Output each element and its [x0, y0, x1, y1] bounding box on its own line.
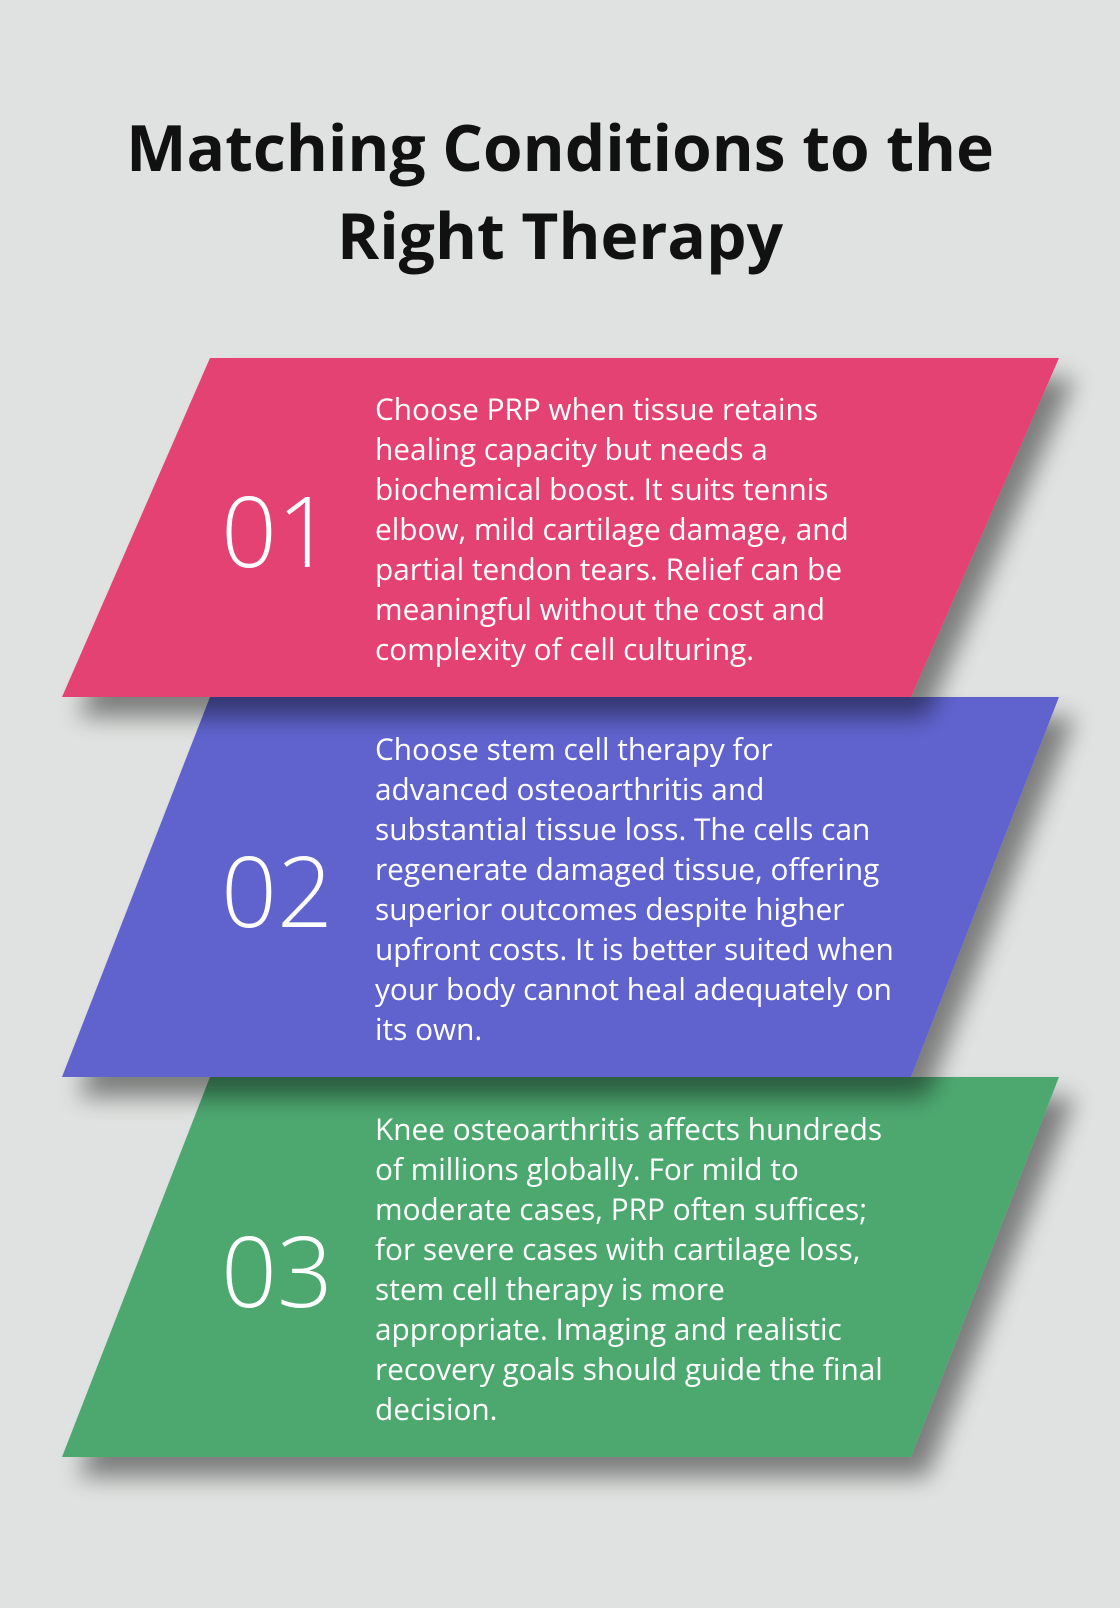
text 3: decision.	[375, 1388, 498, 1429]
text 3: for severe cases with cartilage loss,	[375, 1228, 860, 1269]
text 2: its own.	[375, 1008, 482, 1049]
text 1: biochemical boost. It suits tennis	[375, 468, 828, 509]
text 3	[375, 1108, 883, 1429]
panel 2 shape	[62, 697, 1059, 1077]
text 1: elbow, mild cartilage damage, and	[375, 508, 849, 549]
text 3: of millions globally. For mild to	[375, 1148, 799, 1189]
number 03: 03	[221, 1202, 333, 1336]
title: Matching Conditions to the	[126, 103, 994, 190]
panel 3 shape	[62, 1077, 1059, 1457]
text 2	[375, 728, 894, 1049]
number 01: 01	[221, 462, 333, 596]
text 2: regenerate damaged tissue, offering	[375, 848, 879, 889]
number 02: 02	[221, 822, 333, 956]
text 1: partial tendon tears. Relief can be	[375, 548, 842, 589]
title: Right Therapy	[337, 191, 783, 278]
text 3: stem cell therapy is more	[375, 1268, 725, 1309]
text 2: upfront costs. It is better suited when	[375, 928, 894, 969]
text 3: appropriate. Imaging and realistic	[375, 1308, 842, 1349]
text 2: advanced osteoarthritis and	[375, 768, 764, 809]
text 3: moderate cases, PRP often suffices;	[375, 1188, 867, 1229]
text 3: recovery goals should guide the final	[375, 1348, 883, 1389]
text 1: meaningful without the cost and	[375, 588, 825, 629]
text 2: superior outcomes despite higher	[375, 888, 844, 929]
text 1: healing capacity but needs a	[375, 428, 768, 469]
text 1: complexity of cell culturing.	[375, 628, 754, 669]
text 2: substantial tissue loss. The cells can	[375, 808, 870, 849]
panel 1 shape	[62, 358, 1059, 697]
title	[126, 103, 994, 278]
text 2: your body cannot heal adequately on	[375, 968, 892, 1009]
text 3: Knee osteoarthritis affects hundreds	[375, 1108, 882, 1149]
text 1: Choose PRP when tissue retains	[375, 388, 818, 429]
text 1	[375, 388, 849, 669]
text 2: Choose stem cell therapy for	[375, 728, 773, 769]
